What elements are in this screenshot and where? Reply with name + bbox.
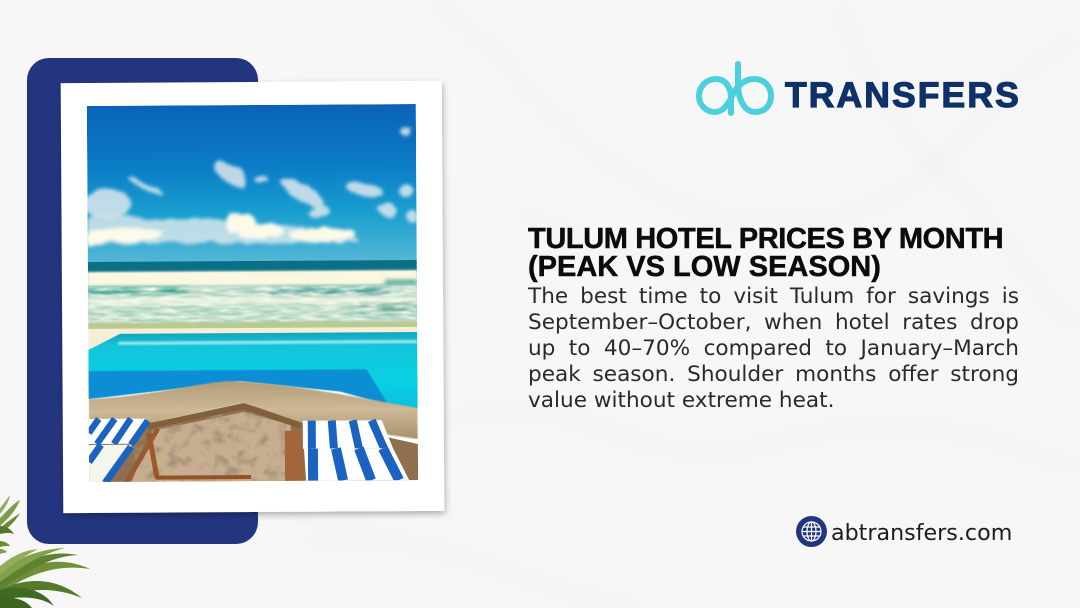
white frame <box>61 81 444 513</box>
sea <box>88 260 417 275</box>
body text: peak season. Shoulder months offer strong <box>528 362 1019 387</box>
logo mark: ab infinity <box>699 64 771 113</box>
photo card <box>61 81 444 513</box>
body text <box>528 284 1019 413</box>
coping shadow line <box>148 406 301 427</box>
clouds <box>83 125 418 244</box>
website url: abtransfers.com <box>831 520 1012 546</box>
pool water <box>88 332 418 413</box>
stone coping <box>89 380 418 441</box>
heading: (PEAK VS LOW SEASON) <box>528 251 881 283</box>
stone patio <box>89 403 418 483</box>
website link <box>796 516 1012 547</box>
background: marble texture <box>300 0 1080 608</box>
icon: globe <box>796 516 827 547</box>
palm leaves <box>0 495 90 608</box>
resort pool photo <box>83 104 419 483</box>
pool deck edge <box>88 327 417 350</box>
body text: September–October, when hotel rates drop <box>528 310 1019 335</box>
left lounger <box>89 418 251 483</box>
body text: The best time to visit Tulum for savings is <box>528 284 1019 309</box>
heading: TULUM HOTEL PRICES BY MONTH <box>528 223 1003 255</box>
navy backing panel <box>27 58 258 544</box>
right lounger <box>285 420 409 482</box>
body text: up to 40–70% compared to January–March <box>528 336 1019 361</box>
logo wordmark: TRANSFERS <box>785 75 1021 115</box>
sky <box>87 104 417 266</box>
body text: value without extreme heat. <box>528 388 834 413</box>
heading <box>528 223 1003 283</box>
